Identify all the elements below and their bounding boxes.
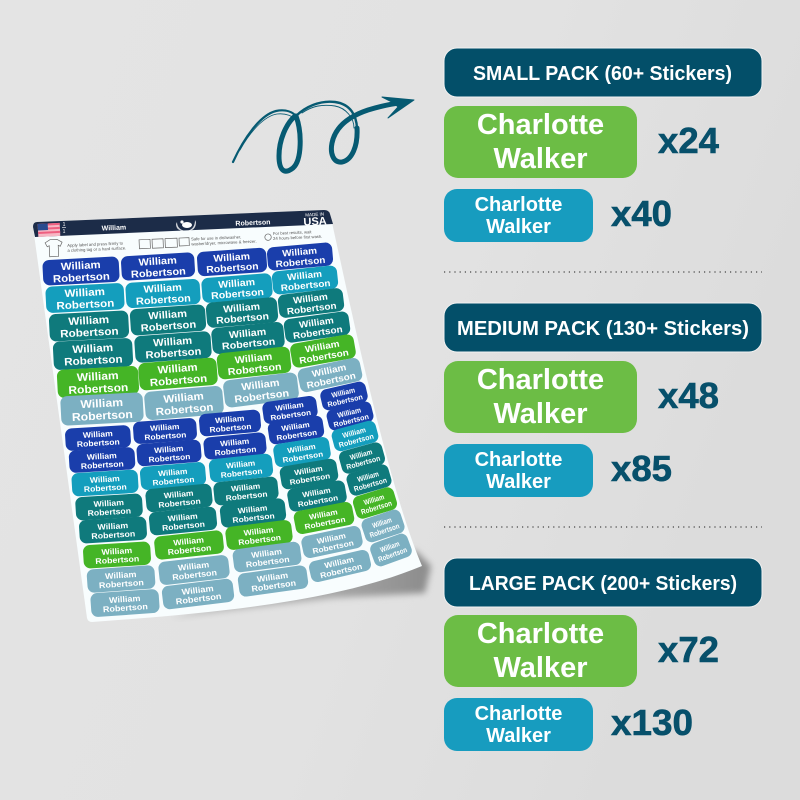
icons: appliances (139, 238, 189, 249)
blue label sample: Walker (486, 725, 551, 747)
large row 5: green (57, 334, 356, 398)
small row 4: teal: William (349, 447, 373, 462)
small row 1: blue: William (215, 414, 245, 425)
heading: large pack (444, 558, 762, 607)
small row 1: blue: Robertson (327, 392, 364, 409)
small row 3: cyan: William (90, 474, 120, 485)
large row 4: teal: William (153, 335, 193, 349)
small row 2: blue: William (220, 437, 250, 448)
small row 1: blue: William (83, 429, 113, 440)
small row 1: blue: Robertson (77, 438, 120, 449)
large row 2: cyan: William (64, 286, 105, 300)
icon: shirt and tag (45, 239, 63, 257)
heading: small pack (444, 48, 762, 97)
large row 1: blue: William (61, 259, 101, 273)
large row 6: slate: Robertson (306, 371, 357, 391)
green label sample: Charlotte (477, 109, 604, 141)
arrow: hand-drawn swirl (233, 97, 414, 171)
large row 2: cyan: Robertson (136, 293, 191, 308)
small row 2: blue (69, 401, 374, 472)
small row 1: blue (65, 381, 368, 450)
small row 3: cyan: William (158, 467, 188, 478)
small row 4: teal (76, 442, 386, 520)
small row 2: blue: Robertson (214, 445, 257, 458)
large row 1: blue: Robertson (275, 255, 326, 270)
quantity: x24 (658, 120, 720, 161)
small row 1: blue: William (331, 386, 356, 400)
small row 3: cyan: Robertson (282, 450, 324, 465)
small row 6: green: Robertson (95, 554, 139, 566)
small row 8: slate: William (109, 593, 141, 605)
small row 5: teal: Robertson (353, 476, 388, 493)
heading: medium pack (444, 303, 762, 352)
large row 5: green: William (157, 362, 198, 376)
green label sample (444, 361, 637, 433)
quantity: x48 (658, 375, 719, 416)
sticker sheet (33, 210, 431, 622)
small row 2: blue: William (154, 444, 184, 455)
large row 3: teal: William (68, 314, 109, 328)
panel: medium pack (444, 303, 762, 497)
small row 7: slate: Robertson (99, 577, 144, 590)
large row 5: green: Robertson (68, 382, 129, 397)
icon: US flag (38, 223, 60, 237)
quantity: x40 (611, 193, 672, 234)
large row 2: cyan: William (143, 282, 182, 296)
small row 6: green: William (173, 535, 204, 547)
small row 5: teal: William (97, 520, 128, 532)
small row 7: slate (87, 509, 405, 592)
small row 7: slate: William (251, 546, 282, 560)
large row 2: cyan: Robertson (56, 298, 115, 312)
small row 4: teal: William (294, 464, 323, 477)
small row 3: cyan: Robertson (84, 483, 127, 494)
large row 3: teal: Robertson (286, 301, 337, 317)
heading: medium pack: MEDIUM PACK (130+ Stickers) (457, 318, 749, 340)
small row 8: slate: Robertson (319, 562, 363, 580)
small row 4: teal: William (93, 497, 124, 509)
small row 6: green (83, 486, 398, 568)
large row 3: teal: William (223, 302, 261, 315)
small row 8: slate: Robertson (251, 578, 297, 594)
small row 1: blue: Robertson (209, 422, 252, 434)
first name field: William (102, 224, 126, 233)
large row 3: teal: William (148, 308, 187, 322)
blue label sample: Walker (486, 471, 551, 493)
small row 5: teal: Robertson (91, 529, 135, 541)
small row 3: cyan (72, 420, 379, 496)
small row 8: slate: Robertson (103, 601, 148, 614)
large row 3: teal: William (293, 292, 328, 306)
small row 3: cyan: William (341, 425, 367, 440)
large row 1: blue: Robertson (53, 271, 110, 285)
heading: large pack: LARGE PACK (200+ Stickers) (469, 573, 737, 595)
green label sample (444, 106, 637, 178)
instruction text: wash: For best results, wait (273, 229, 312, 236)
large row 5: green: Robertson (299, 348, 350, 367)
blue label sample (444, 444, 593, 497)
blue label sample: Walker (486, 216, 551, 238)
large row 1: blue: Robertson (131, 266, 186, 281)
large row 2: cyan: Robertson (211, 287, 264, 302)
small row 5: teal: Robertson (232, 512, 275, 525)
small row 8: slate: William (379, 539, 401, 554)
large row 3: teal: Robertson (216, 312, 269, 327)
small row 8: slate (91, 533, 413, 617)
blue label sample (444, 698, 593, 751)
large row 6: slate: William (163, 391, 204, 406)
small row 7: slate: Robertson (245, 554, 290, 569)
green label sample (444, 615, 637, 687)
large row 2: cyan: Robertson (280, 278, 331, 294)
large row 2: cyan: William (287, 269, 322, 283)
large row 3: teal: Robertson (140, 319, 197, 334)
large row 6: slate: William (311, 362, 347, 380)
large row 6: slate: Robertson (234, 388, 290, 406)
small row 6: green: William (363, 492, 385, 507)
large row 6: slate: William (241, 377, 280, 393)
small row 4: teal: Robertson (345, 454, 382, 471)
quantity: x130 (611, 702, 693, 743)
small row 5: teal: William (167, 512, 198, 523)
small row 6: green: William (243, 525, 274, 538)
sheet index: 1 (63, 222, 66, 228)
small row 4: teal: Robertson (158, 497, 201, 510)
large row 4: teal: William (72, 342, 113, 356)
large row 3: teal: Robertson (60, 326, 119, 340)
small row 5: teal: William (302, 486, 331, 499)
instruction row (45, 228, 323, 257)
small row 7: slate: William (105, 569, 137, 581)
large row 4: teal: Robertson (292, 324, 343, 342)
heading: small pack: SMALL PACK (60+ Stickers) (473, 63, 732, 85)
large row 5: green: William (77, 370, 119, 384)
instruction text: apply: a clothing tag or a hard surface. (67, 245, 126, 253)
large row 1: blue: William (213, 252, 250, 265)
small row 6: green: William (308, 508, 338, 522)
green label sample: Charlotte (477, 618, 604, 650)
green label sample: Walker (493, 398, 588, 430)
quantity: x72 (658, 629, 719, 670)
small row 6: green: Robertson (167, 543, 212, 557)
small row 1: blue: Robertson (270, 408, 312, 422)
made in USA mark: MADE IN (305, 212, 324, 217)
sheet header band (33, 210, 333, 237)
large row 5: green: Robertson (227, 362, 282, 378)
small row 3: cyan: William (287, 442, 316, 455)
small row 3: cyan: Robertson (338, 432, 375, 450)
instruction text: apply: Apply label and press firmly to (67, 240, 123, 248)
large row 2: cyan (46, 266, 338, 313)
small row 4: teal: William (164, 489, 194, 500)
quantity: x85 (611, 448, 672, 489)
large row 4: teal: William (229, 327, 267, 341)
sheet index: 1 (63, 229, 66, 235)
green label sample: Charlotte (477, 364, 604, 396)
small row 8: slate: William (256, 570, 289, 584)
icon: clock (265, 234, 271, 240)
small row 3: cyan: William (226, 459, 256, 470)
small row 2: blue: Robertson (276, 428, 318, 443)
small row 5: teal: Robertson (162, 520, 205, 533)
green label sample: Walker (493, 143, 588, 175)
small row 2: blue: William (281, 420, 310, 433)
small row 7: slate: William (316, 531, 347, 546)
large row 6: slate (61, 358, 363, 425)
small row 4: teal: Robertson (225, 490, 268, 503)
blue label sample (444, 189, 593, 242)
small row 7: slate: Robertson (312, 539, 355, 556)
blue label sample: Charlotte (475, 703, 562, 725)
large row 4: teal: Robertson (222, 337, 276, 352)
small row 6: green: Robertson (304, 515, 346, 531)
instruction text: wash: 24 hours before first wash. (273, 234, 323, 241)
sheet index (62, 222, 66, 235)
last name field: Robertson (235, 219, 271, 228)
large row 6: slate: Robertson (155, 402, 214, 418)
large row 1: blue: William (138, 255, 177, 269)
small row 8: slate: Robertson (377, 545, 408, 564)
small row 4: teal: Robertson (87, 506, 131, 518)
large row 4: teal (53, 311, 350, 370)
instruction text: safe: Safe for use in dishwasher, (191, 234, 241, 242)
large row 4: teal: Robertson (145, 346, 202, 361)
small row 6: green: Robertson (238, 533, 281, 547)
small row 4: teal: Robertson (289, 472, 331, 487)
large row 5: green: William (304, 339, 340, 355)
small row 6: green: William (101, 545, 132, 557)
small row 5: teal (79, 464, 392, 543)
blue label sample: Charlotte (475, 449, 562, 471)
large row 6: slate: Robertson (72, 408, 133, 424)
large row 1: blue: William (282, 246, 317, 259)
small row 7: slate: Robertson (172, 567, 217, 582)
small row 8: slate: Robertson (175, 591, 222, 606)
small row 7: slate: William (371, 515, 393, 530)
small row 5: teal: William (237, 504, 268, 516)
large row 3: teal (49, 288, 344, 341)
large row 4: teal: William (298, 316, 334, 331)
small row 8: slate: William (324, 555, 355, 570)
small row 3: cyan: Robertson (220, 467, 263, 480)
small row 1: blue: William (275, 400, 304, 413)
small row 2: blue: Robertson (148, 452, 191, 464)
made in USA mark: USA (303, 215, 327, 229)
small row 6: green: Robertson (360, 499, 393, 516)
large row 1: blue (43, 243, 333, 286)
small row 7: slate: Robertson (368, 522, 401, 540)
panel: large pack (444, 558, 762, 751)
small row 5: teal: Robertson (297, 493, 339, 509)
instruction text: safe: washer/dryer, microwave & freezer. (191, 239, 257, 247)
small row 3: cyan: Robertson (152, 475, 195, 487)
large row 6: slate: William (80, 396, 123, 411)
large row 4: teal: Robertson (64, 354, 123, 368)
panel: small pack (444, 48, 762, 242)
large name stickers (43, 243, 363, 425)
small name stickers (65, 381, 413, 617)
small row 5: teal: William (356, 469, 380, 484)
blue label sample: Charlotte (475, 194, 562, 216)
small row 1: blue: Robertson (144, 431, 187, 442)
small row 2: blue: Robertson (333, 412, 370, 429)
small row 1: blue: William (150, 422, 180, 433)
small row 8: slate: William (181, 583, 214, 597)
small row 4: teal: William (231, 482, 261, 493)
large row 2: cyan: William (218, 277, 256, 291)
large row 5: green: Robertson (149, 373, 208, 389)
large row 1: blue: Robertson (206, 262, 259, 276)
green label sample: Walker (493, 652, 588, 684)
large row 5: green: William (234, 352, 273, 366)
small row 7: slate: William (177, 560, 210, 573)
small row 2: blue: William (87, 451, 117, 462)
icon: logo (176, 220, 196, 231)
small row 2: blue: William (336, 406, 362, 420)
small row 2: blue: Robertson (81, 460, 124, 471)
